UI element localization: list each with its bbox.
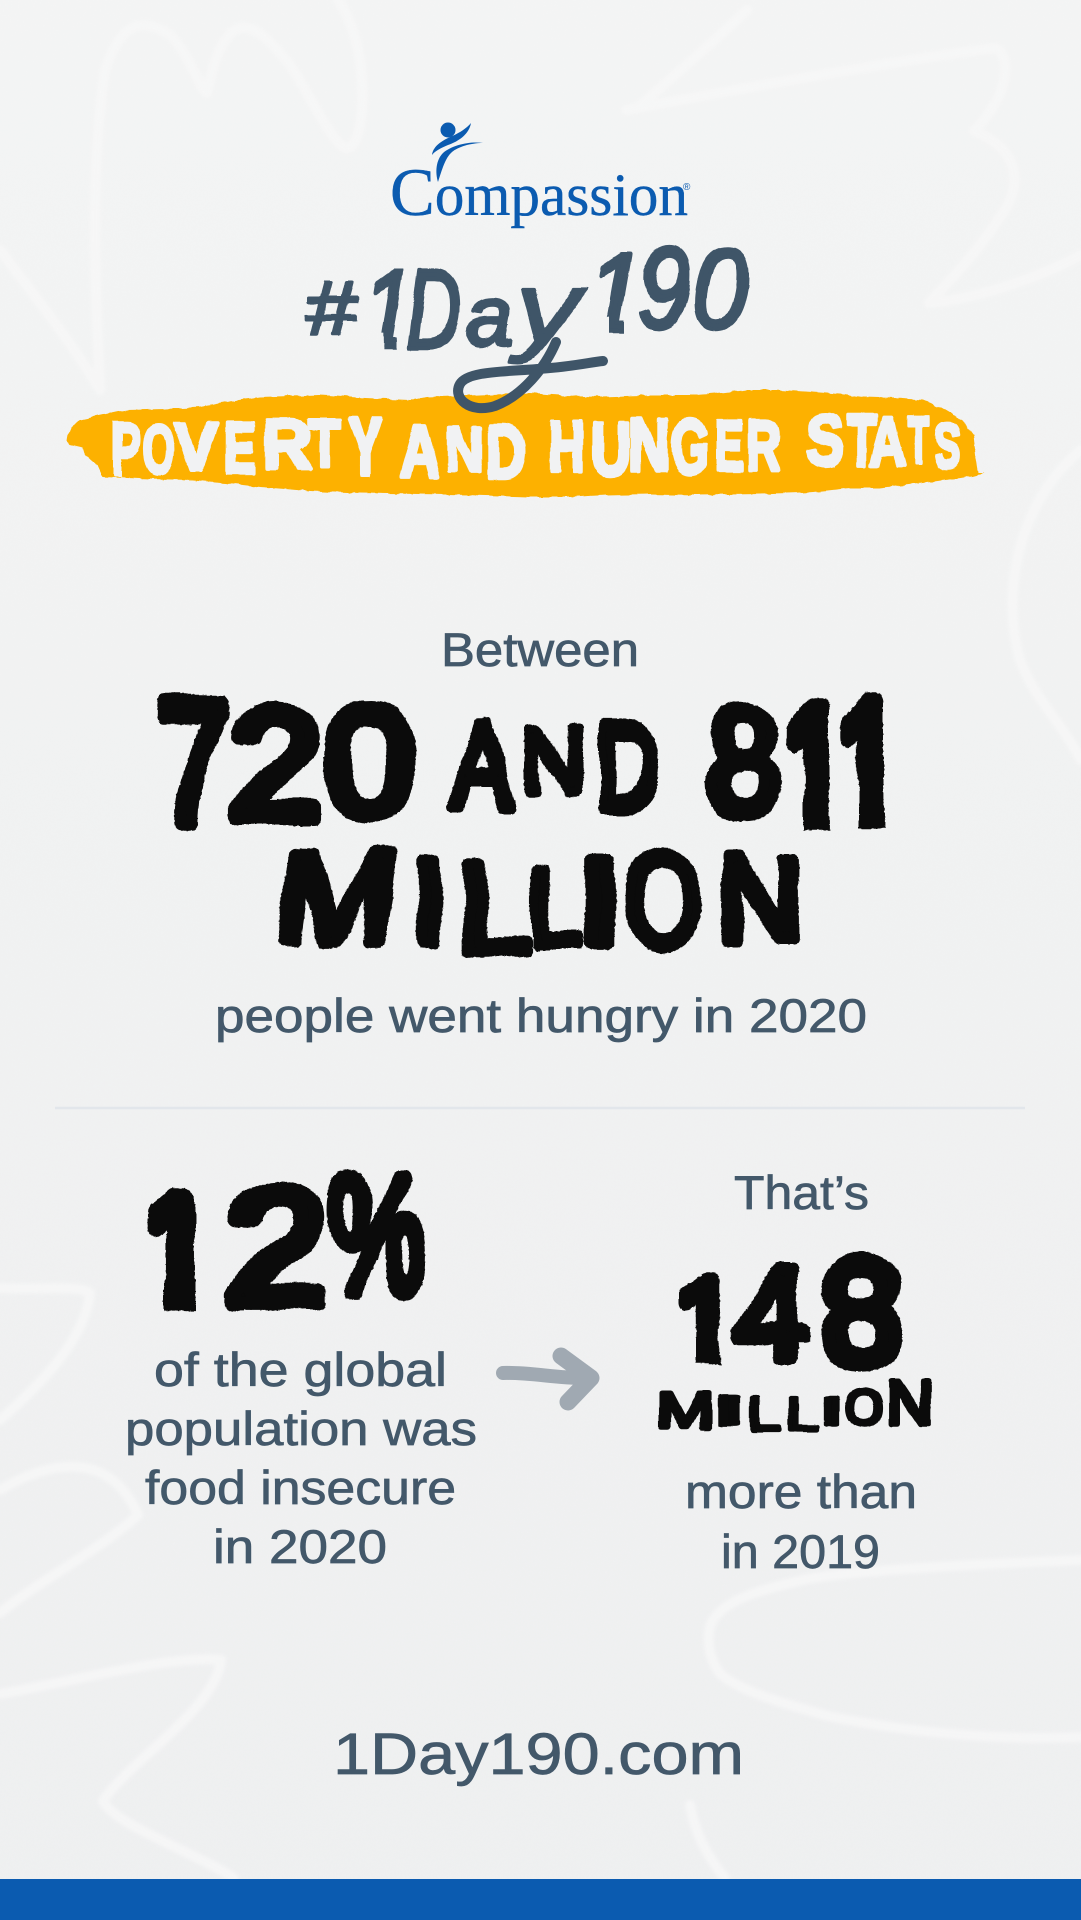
logo: Compassion xyxy=(390,122,691,230)
banner text: poverty and hunger stats xyxy=(111,400,961,495)
big stat: 720 and 811: 2 xyxy=(230,678,322,852)
big stat: 720 and 811: A xyxy=(451,697,514,833)
stat: small million: N xyxy=(886,1368,934,1438)
big stat: 148 xyxy=(678,1251,903,1372)
stat: small million: O xyxy=(845,1380,883,1436)
big stat: 148: 8 xyxy=(821,1230,901,1395)
banner text: poverty and hunger stats: H xyxy=(548,407,585,487)
big stat: million xyxy=(267,825,803,978)
stat: small million: L xyxy=(748,1389,780,1441)
banner text: poverty and hunger stats: E xyxy=(224,408,256,488)
text: more than in 2019: more than xyxy=(685,1465,917,1518)
big stat: 12%: 2 xyxy=(226,1155,328,1339)
stat: small million: I xyxy=(820,1389,844,1434)
footer url: 1Day190.com xyxy=(333,1722,744,1787)
big stat: 720 and 811: 1 xyxy=(838,673,899,851)
banner text: poverty and hunger stats: R xyxy=(747,406,780,485)
text: people went hungry: people went hungry in 2020 xyxy=(215,989,867,1042)
big stat: 720 and 811: N xyxy=(522,709,585,814)
banner text: poverty and hunger stats: N xyxy=(445,415,484,485)
heading: #1Day190: # xyxy=(306,266,358,352)
big stat: million: M xyxy=(267,825,407,970)
arrow xyxy=(503,1356,591,1402)
text: global population: population was xyxy=(125,1402,477,1455)
text: more than in 2019 xyxy=(685,1465,917,1578)
banner text: poverty and hunger stats: Y xyxy=(348,403,382,493)
heading: #1Day190: y xyxy=(508,251,587,364)
big stat: million: L xyxy=(459,836,529,978)
heading: #1Day190: 1 xyxy=(362,248,414,372)
banner text: poverty and hunger stats: T xyxy=(908,405,929,478)
big stat: million: I xyxy=(577,834,623,969)
banner text: poverty and hunger stats: G xyxy=(671,407,709,490)
text: global population xyxy=(125,1343,477,1573)
big stat: million: L xyxy=(527,845,583,969)
big stat: 720 and 811: 0 xyxy=(324,677,415,848)
banner text: poverty and hunger stats: O xyxy=(143,411,175,488)
big stat: 148: 4 xyxy=(736,1238,808,1387)
heading: #1Day190: D xyxy=(407,248,461,373)
big stat: 720 and 811: D xyxy=(596,697,660,834)
text: that's: That’s xyxy=(734,1166,869,1219)
footer bar xyxy=(0,1879,1081,1920)
big stat: 148: 1 xyxy=(677,1258,735,1381)
stat: small million: I xyxy=(712,1386,746,1434)
big stat: million: N xyxy=(717,830,803,968)
banner text: poverty and hunger stats: A xyxy=(869,403,906,481)
big stat: million: O xyxy=(624,830,703,972)
text: global population: of the global xyxy=(154,1343,447,1396)
banner text: poverty and hunger stats: D xyxy=(486,411,526,495)
banner text: poverty and hunger stats: P xyxy=(111,408,141,492)
heading: #1Day190: 1 xyxy=(587,231,643,355)
banner text: poverty and hunger stats: V xyxy=(174,410,218,485)
banner text: poverty and hunger stats: U xyxy=(591,408,631,492)
big stat: 720 and 811: 1 xyxy=(783,678,845,856)
banner text: poverty and hunger stats: R xyxy=(262,405,311,483)
banner text: poverty and hunger stats: A xyxy=(400,411,440,492)
stat: small million: M xyxy=(656,1382,714,1439)
logo wordmark: Compassion xyxy=(390,154,688,230)
banner text: poverty and hunger stats: N xyxy=(628,404,670,488)
registered mark: ® xyxy=(683,182,691,193)
heading: #1Day190: 0 xyxy=(692,228,748,352)
heading: #1Day190 xyxy=(304,244,750,364)
banner: orange brush band xyxy=(66,390,984,497)
banner text: poverty and hunger stats: S xyxy=(934,412,961,482)
banner text: poverty and hunger stats: T xyxy=(848,401,876,481)
big stat: 12% xyxy=(147,1169,426,1312)
big stat: million: I xyxy=(411,833,447,971)
divider xyxy=(55,1107,1025,1109)
y swash over banner xyxy=(458,342,603,408)
icon: Compassion figure xyxy=(432,122,483,182)
stat: small million xyxy=(656,1368,934,1441)
heading: #1Day190: a xyxy=(465,269,513,364)
big stat: 12%: % xyxy=(329,1141,427,1325)
big stat: 720 and 811 xyxy=(156,692,886,832)
big stat: 720 and 811: 8 xyxy=(707,678,780,845)
text: more than in 2019: in 2019 xyxy=(721,1525,880,1578)
text: global population: in 2020 xyxy=(213,1520,387,1573)
banner text: poverty and hunger stats: E xyxy=(714,406,744,486)
big stat: 12%: 1 xyxy=(143,1165,213,1335)
banner text: poverty and hunger stats: S xyxy=(807,400,844,481)
big stat: 720 and 811: 7 xyxy=(157,665,230,859)
heading: #1Day190: 9 xyxy=(638,224,690,353)
banner text: poverty and hunger stats: T xyxy=(308,406,341,480)
text: between: Between xyxy=(441,623,639,676)
stat: small million: L xyxy=(786,1389,818,1441)
text: global population: food insecure xyxy=(145,1461,456,1514)
